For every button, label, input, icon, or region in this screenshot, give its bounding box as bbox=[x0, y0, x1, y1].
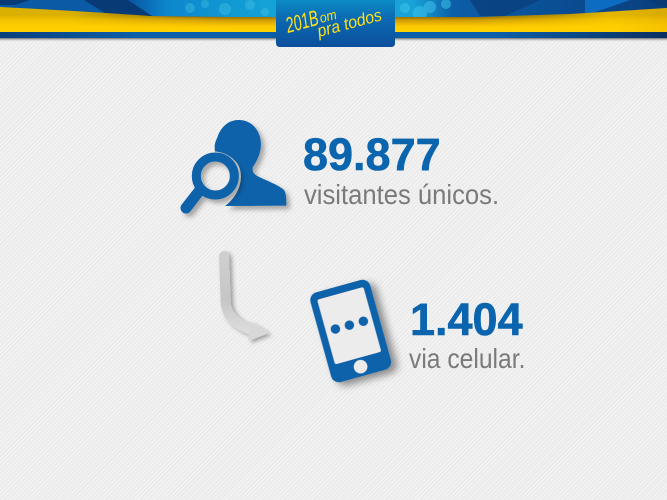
arrow bbox=[219, 250, 272, 344]
person silhouette bbox=[215, 120, 286, 206]
stat: visitors label: visitantes únicos. bbox=[304, 179, 499, 210]
logo text: year: 201B bbox=[282, 5, 321, 38]
photo strip bbox=[0, 0, 667, 20]
icon: person with magnifier bbox=[180, 120, 292, 220]
icon: smartphone bbox=[310, 278, 402, 390]
blue stripe bbox=[0, 32, 667, 38]
logo text: slogan: pra todos bbox=[314, 5, 384, 41]
phone body bbox=[308, 278, 393, 384]
header banner bbox=[0, 0, 667, 41]
message dots bbox=[330, 315, 369, 335]
magnifier bbox=[186, 157, 234, 208]
logo text: om: om bbox=[318, 6, 338, 26]
stat: mobile number: 1.404 bbox=[410, 294, 523, 345]
home button bbox=[352, 358, 369, 375]
yellow stripe bbox=[0, 7, 667, 32]
stat: mobile label: via celular. bbox=[409, 343, 525, 374]
screen bbox=[317, 287, 381, 364]
logo badge bbox=[276, 0, 395, 47]
stat: visitors number: 89.877 bbox=[303, 128, 441, 180]
